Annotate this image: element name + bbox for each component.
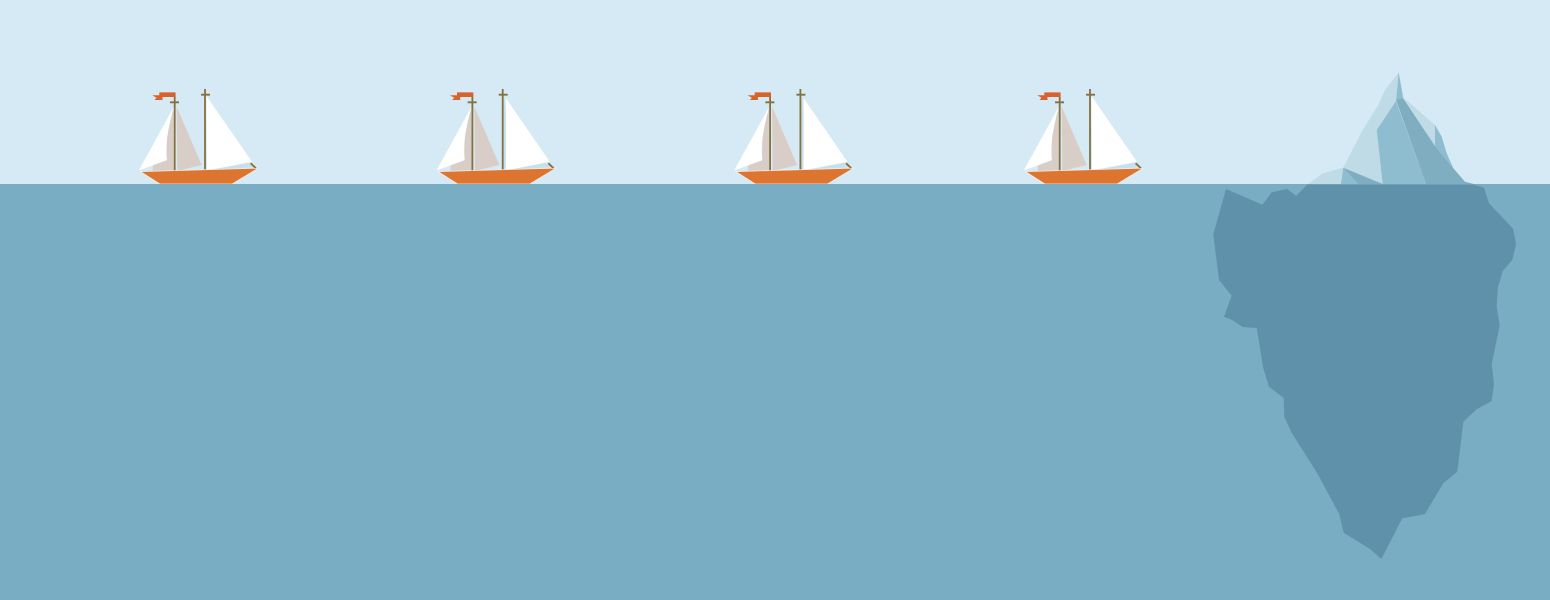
iceberg: light left face [1308,72,1399,184]
sky background [0,0,1550,184]
sail shadow [207,162,254,171]
iceberg: right medium facet [1435,125,1453,168]
grey sails [748,106,797,172]
sail shadow sliver [800,97,805,170]
flag [450,92,473,100]
iceberg below the waterline [1213,184,1516,559]
ship 3 [735,89,854,184]
grey sails [450,106,499,172]
hull [140,168,258,184]
iceberg: shaded face [1396,98,1474,184]
masts and crossbars [468,89,554,172]
water [0,184,1550,600]
hull [736,168,854,184]
sail shadow sliver [503,97,507,170]
grey sails [1038,106,1087,172]
hull [1026,168,1143,184]
iceberg: centre face [1377,101,1426,184]
flag [152,92,176,100]
flag [748,92,771,100]
ship 2 [437,89,556,184]
white sails [735,99,847,170]
masts and crossbars [765,89,851,172]
ship 1 [139,89,258,184]
sail shadow [505,162,552,171]
white sails [1024,97,1137,170]
masts and crossbars [1055,89,1141,172]
iceberg: right light facet [1404,98,1435,146]
masts and crossbars [170,89,256,172]
iceberg above the waterline [1308,72,1474,184]
sail shadow [1092,162,1139,171]
iceberg: peak facet [1396,72,1403,101]
ship 4 [1024,89,1143,184]
white sails [139,97,252,170]
grey sails [152,106,202,172]
white sails [437,99,549,170]
iceberg: lower left shaded facet [1343,168,1383,184]
iceberg: lower left medium facet [1341,168,1358,184]
sail shadow [803,162,849,171]
hull [438,168,556,184]
flag [1037,92,1060,100]
